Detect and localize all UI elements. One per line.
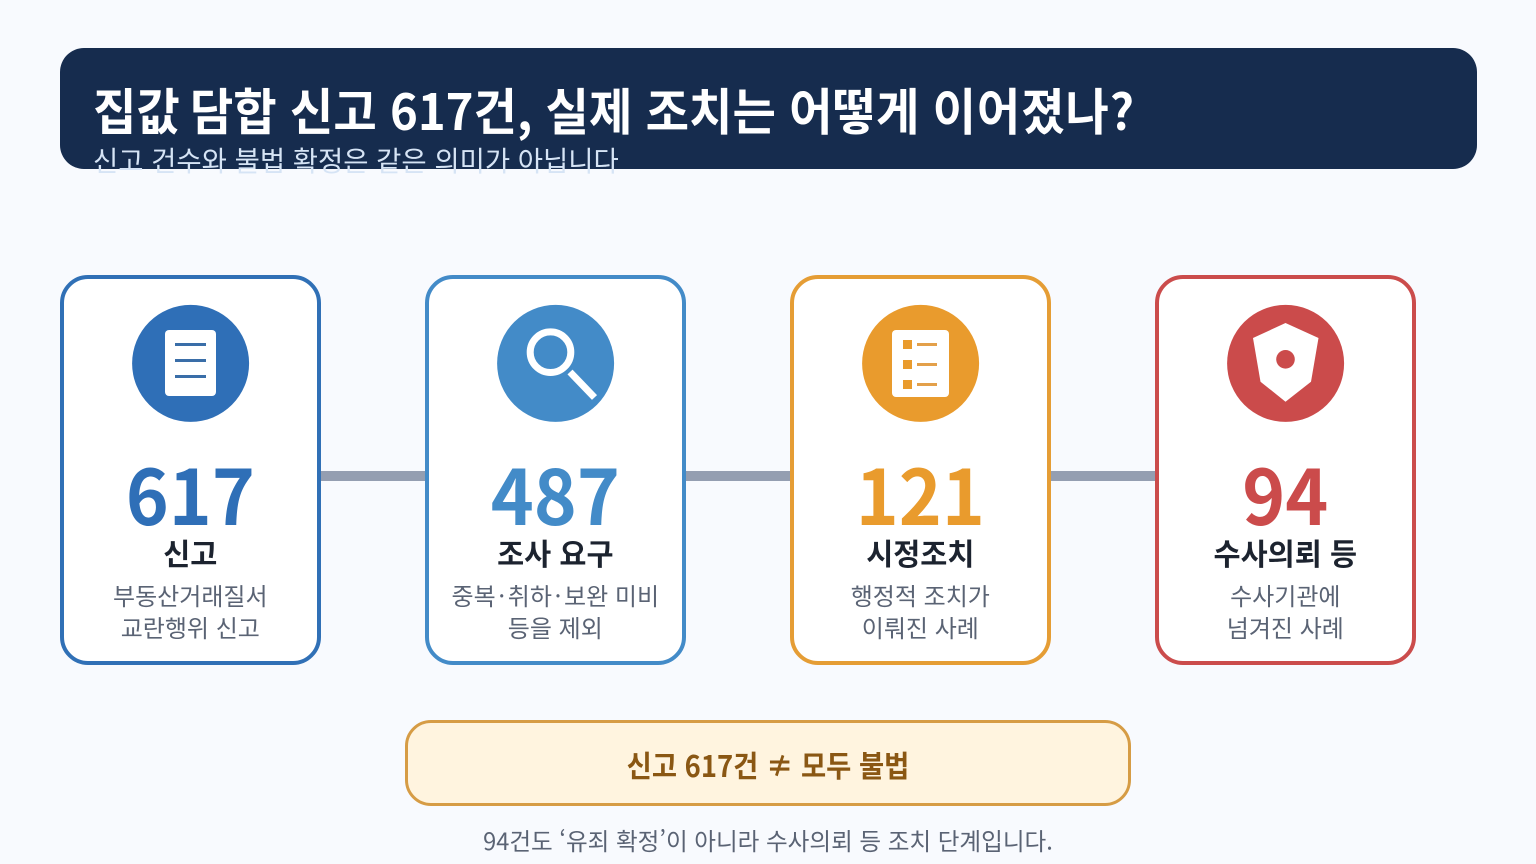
description line 2: 교란행위 신고 (121, 609, 260, 644)
description line 1: 행정적 조치가 (851, 577, 990, 612)
icon: shield (1227, 304, 1344, 422)
connector: report to investigation (320, 471, 426, 481)
title: 집값 담합 신고 617건, 실제 조치는 어떻게 이어졌나? (93, 72, 1135, 144)
description line 2: 등을 제외 (508, 609, 603, 644)
panel: corrective action card (790, 275, 1051, 665)
connector: investigation to corrective action (685, 471, 791, 481)
header banner (60, 48, 1477, 169)
label: 조사 요구: 조사 요구 (497, 530, 614, 574)
number: 617: 617 (126, 437, 255, 547)
panel: report card (60, 275, 321, 665)
number: 121: 121 (856, 437, 985, 547)
icon: checklist (862, 304, 980, 422)
callout (405, 720, 1131, 806)
footnote: 94건도 ‘유죄 확정’이 아니라 수사의뢰 등 조치 단계입니다. (483, 822, 1053, 857)
subtitle: 신고 건수와 불법 확정은 같은 의미가 아닙니다 (93, 140, 619, 180)
description line 1: 수사기관에 (1230, 577, 1340, 612)
icon: document (132, 304, 250, 422)
number: 487: 487 (491, 437, 620, 547)
icon: magnifier (497, 304, 614, 422)
description line 1: 부동산거래질서 (113, 577, 268, 612)
callout text: 신고 617건 ≠ 모두 불법 (627, 742, 909, 786)
label: 수사의뢰 등: 수사의뢰 등 (1214, 530, 1357, 574)
description line 2: 이뤄진 사례 (862, 609, 979, 644)
description line 1: 중복·취하·보완 미비 (452, 577, 659, 612)
label: 신고: 신고 (163, 530, 217, 574)
panel: investigation card (425, 275, 686, 665)
panel: referral card (1155, 275, 1416, 665)
number: 94: 94 (1242, 437, 1328, 547)
connector: corrective action to referral (1050, 471, 1156, 481)
description line 2: 넘겨진 사례 (1227, 609, 1344, 644)
label: 시정조치: 시정조치 (866, 530, 974, 574)
